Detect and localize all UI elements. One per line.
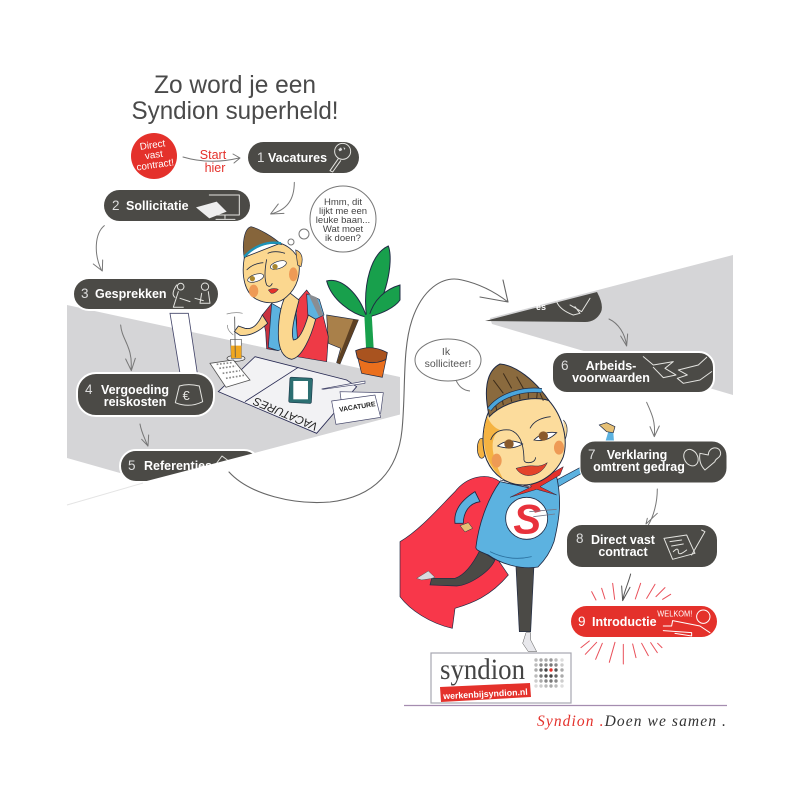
label: paper heading: VACATURES xyxy=(251,394,320,432)
step 6: Arbeidsvoorwaarden: Arbeids- xyxy=(586,359,636,373)
body and head xyxy=(455,364,567,568)
hero arm xyxy=(455,492,480,523)
paper xyxy=(218,357,357,433)
step 1: Vacatures xyxy=(248,142,359,173)
badge: direct vast contract: vast xyxy=(144,149,164,162)
step 3: Gesprekken: 3 xyxy=(81,286,89,301)
badge: direct vast contract xyxy=(131,133,177,179)
step 5: Referenties, cut by wedge: 5 xyxy=(128,458,136,473)
step 8: Direct vast contract xyxy=(567,525,717,567)
step 9: Introductie: Introductie xyxy=(592,615,657,629)
icon: signed contract xyxy=(664,530,705,559)
badge: direct vast contract: contract! xyxy=(136,157,175,173)
faint fold line xyxy=(67,483,143,505)
step 8: Direct vast contract: Direct vast xyxy=(591,533,656,547)
panel: white wedge hiding the lower left xyxy=(122,414,402,520)
illustration: desk items xyxy=(170,313,383,433)
step 6: Arbeidsvoorwaarden: voorwaarden xyxy=(572,371,650,385)
thought bubble: leuke baan... xyxy=(316,215,370,226)
thought bubble: Hmm, dit xyxy=(324,197,362,208)
step 8: Direct vast contract: 8 xyxy=(576,531,584,546)
step 2: Sollicitatie: 2 xyxy=(112,198,120,213)
raised arm and fist xyxy=(557,423,615,487)
step 5: Referenties, cut by wedge: Referenties xyxy=(144,459,212,473)
logo: syndion sign: werkenbijsyndion.nl xyxy=(442,687,528,701)
step 7: Verklaring omtrent gedrag: Verklaring xyxy=(607,448,667,462)
monitor xyxy=(170,313,197,373)
thought bubble xyxy=(288,186,376,252)
arrow: step 3 to 4 xyxy=(121,325,135,371)
panel: right grey wedge background xyxy=(490,255,733,395)
step 6: Arbeidsvoorwaarden: 6 xyxy=(561,358,569,373)
step 1: Vacatures: Vacatures xyxy=(268,151,327,165)
thought bubble: Wat moet xyxy=(323,224,364,235)
arrow: step 5 to 6 xyxy=(609,319,628,346)
glass with juice xyxy=(227,313,245,361)
icon: welkom handshake xyxy=(657,609,710,636)
icon: envelope and monitor xyxy=(196,195,239,219)
logo red banner xyxy=(440,683,531,702)
woman face xyxy=(243,243,299,303)
cape xyxy=(400,476,508,628)
illustration: chair xyxy=(327,315,358,364)
speech bubble: ik solliciteer xyxy=(415,339,481,391)
arrow: step 8 to 9 xyxy=(622,574,631,601)
step 1: Vacatures: 1 xyxy=(257,150,265,165)
icon: purse with euro: € xyxy=(183,389,190,403)
start hier label with arrow: Start xyxy=(200,148,227,162)
phone xyxy=(289,377,313,404)
arrow: step 6 to 7 xyxy=(647,402,659,437)
step 7: Verklaring omtrent gedrag xyxy=(580,441,727,483)
emblem S: S xyxy=(513,495,541,542)
arrow: step 7 to 8 xyxy=(646,489,657,525)
ears xyxy=(477,438,486,458)
illustration: plant xyxy=(327,246,400,377)
thought bubble: ik doen? xyxy=(325,233,361,244)
step 5: Referenties, cut by wedge xyxy=(120,450,260,482)
logo: syndion sign xyxy=(431,653,571,703)
pen xyxy=(322,381,365,389)
legs and shoes xyxy=(417,550,537,652)
step 2: Sollicitatie: Sollicitatie xyxy=(126,199,189,213)
panel: left grey desk background xyxy=(67,305,400,482)
emblem S xyxy=(506,495,557,542)
hero face xyxy=(483,397,565,485)
step 9: Introductie: 9 xyxy=(578,614,586,629)
logo dot matrix xyxy=(534,658,564,688)
icon: handshake xyxy=(643,357,712,383)
speech bubble: ik solliciteer: solliciteer! xyxy=(425,358,471,370)
title: Zo word je een xyxy=(154,71,316,99)
speech bubble: ik solliciteer: Ik xyxy=(442,346,451,358)
woman body xyxy=(234,290,328,362)
step 5 continued: dark wedge xyxy=(485,292,602,322)
arrow: step 2 to 3 xyxy=(93,226,104,271)
illustration: thinking woman xyxy=(234,227,328,362)
step 7: Verklaring omtrent gedrag: omtrent gedrag xyxy=(593,460,685,474)
icon: interview people xyxy=(173,283,210,307)
start hier label with arrow xyxy=(183,148,240,175)
icon: magnifying glass xyxy=(330,143,351,172)
vacancy cards xyxy=(340,392,383,417)
tagline: Syndion .Doen we samen . xyxy=(537,713,727,730)
icon: stamp xyxy=(681,447,721,470)
thought bubble: lijkt me een xyxy=(319,206,367,217)
step 4: Vergoeding reiskosten xyxy=(77,373,214,416)
step 3: Gesprekken xyxy=(73,278,219,310)
icon: welkom handshake: WELKOM! xyxy=(657,609,692,619)
keyboard xyxy=(210,360,250,387)
hero hair xyxy=(486,364,549,417)
step 2: Sollicitatie xyxy=(104,190,250,221)
arrow: big connecting curve xyxy=(229,279,508,503)
step 6: Arbeidsvoorwaarden xyxy=(552,352,714,393)
start hier label with arrow: hier xyxy=(205,161,225,175)
step 7: Verklaring omtrent gedrag: 7 xyxy=(588,447,596,462)
label: card heading: VACATURE xyxy=(339,401,377,414)
title: Syndion superheld! xyxy=(132,97,338,125)
logo: syndion sign: syndion xyxy=(440,653,525,686)
icon: handset xyxy=(557,298,590,315)
step 4: Vergoeding reiskosten: reiskosten xyxy=(104,395,166,409)
illustration: superhero xyxy=(400,364,615,652)
step 8: Direct vast contract: contract xyxy=(598,545,648,559)
step 9: Introductie xyxy=(571,606,717,637)
arrow: step 4 to 5 xyxy=(140,424,149,446)
woman hair xyxy=(243,227,282,258)
arrow: step 1 to 2 xyxy=(271,182,294,214)
step 5 continued: dark wedge: es xyxy=(536,302,546,312)
badge: direct vast contract: Direct xyxy=(139,138,166,153)
step 3: Gesprekken: Gesprekken xyxy=(95,287,167,301)
rays: celebration around step 9 xyxy=(581,583,671,664)
step 4: Vergoeding reiskosten: Vergoeding xyxy=(101,383,169,397)
neck scarf xyxy=(500,467,563,497)
step 4: Vergoeding reiskosten: 4 xyxy=(85,382,93,397)
title xyxy=(132,71,338,125)
footer rule xyxy=(404,704,727,706)
